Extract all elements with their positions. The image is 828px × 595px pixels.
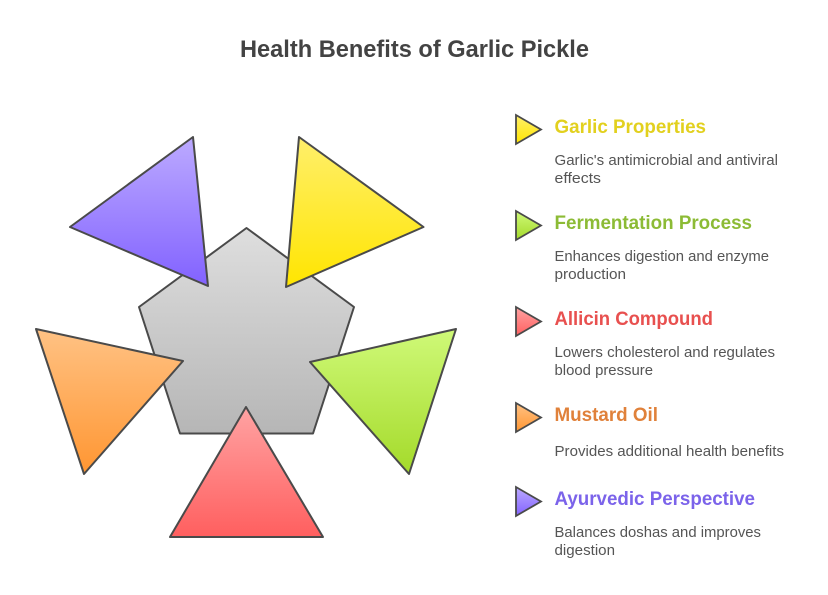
central pentagon xyxy=(139,228,354,434)
heading: Mustard Oil: Mustard Oil xyxy=(554,405,658,426)
triangle: Fermentation Process (green) xyxy=(310,329,456,474)
legend item: Mustard Oil xyxy=(516,403,784,460)
text: Allicin Compound description: blood pressure xyxy=(554,363,653,379)
triangle: Ayurvedic Perspective (purple) xyxy=(70,137,208,286)
icon: yellow marker xyxy=(516,115,541,144)
legend item: Allicin Compound xyxy=(516,307,775,379)
text: Mustard Oil description: Provides additional health benefits xyxy=(554,444,784,460)
icon: green marker xyxy=(516,211,541,240)
heading: Garlic Properties: Garlic Properties xyxy=(554,117,706,138)
text: Allicin Compound description: Lowers cholesterol and regulates xyxy=(554,345,775,361)
legend item: Fermentation Process xyxy=(516,211,769,283)
legend item: Garlic Properties xyxy=(516,115,778,187)
text: Allicin Compound description xyxy=(554,345,775,379)
triangle: Mustard Oil (orange) xyxy=(36,329,183,474)
triangle: Garlic Properties (yellow) xyxy=(286,137,424,287)
text: Fermentation Process description: production xyxy=(554,267,626,283)
text: Ayurvedic Perspective description: digestion xyxy=(554,543,615,559)
text: Garlic Properties description xyxy=(554,153,778,187)
title: Health Benefits of Garlic Pickle xyxy=(240,36,589,63)
text: Fermentation Process description xyxy=(554,249,769,283)
icon: orange marker xyxy=(516,403,541,432)
icon: purple marker xyxy=(516,487,541,516)
text: Fermentation Process description: Enhances digestion and enzyme xyxy=(554,249,769,265)
heading: Fermentation Process: Fermentation Process xyxy=(554,213,752,234)
text: Garlic Properties description: effects xyxy=(554,171,601,187)
heading: Ayurvedic Perspective: Ayurvedic Perspective xyxy=(554,489,755,510)
icon: red marker xyxy=(516,307,541,336)
text: Garlic Properties description: Garlic's antimicrobial and antiviral xyxy=(554,153,778,169)
text: Ayurvedic Perspective description xyxy=(554,525,761,559)
triangle: Allicin Compound (red) xyxy=(170,407,323,537)
heading: Allicin Compound: Allicin Compound xyxy=(554,309,713,330)
text: Ayurvedic Perspective description: Balances doshas and improves xyxy=(554,525,761,541)
legend item: Ayurvedic Perspective xyxy=(516,487,761,559)
